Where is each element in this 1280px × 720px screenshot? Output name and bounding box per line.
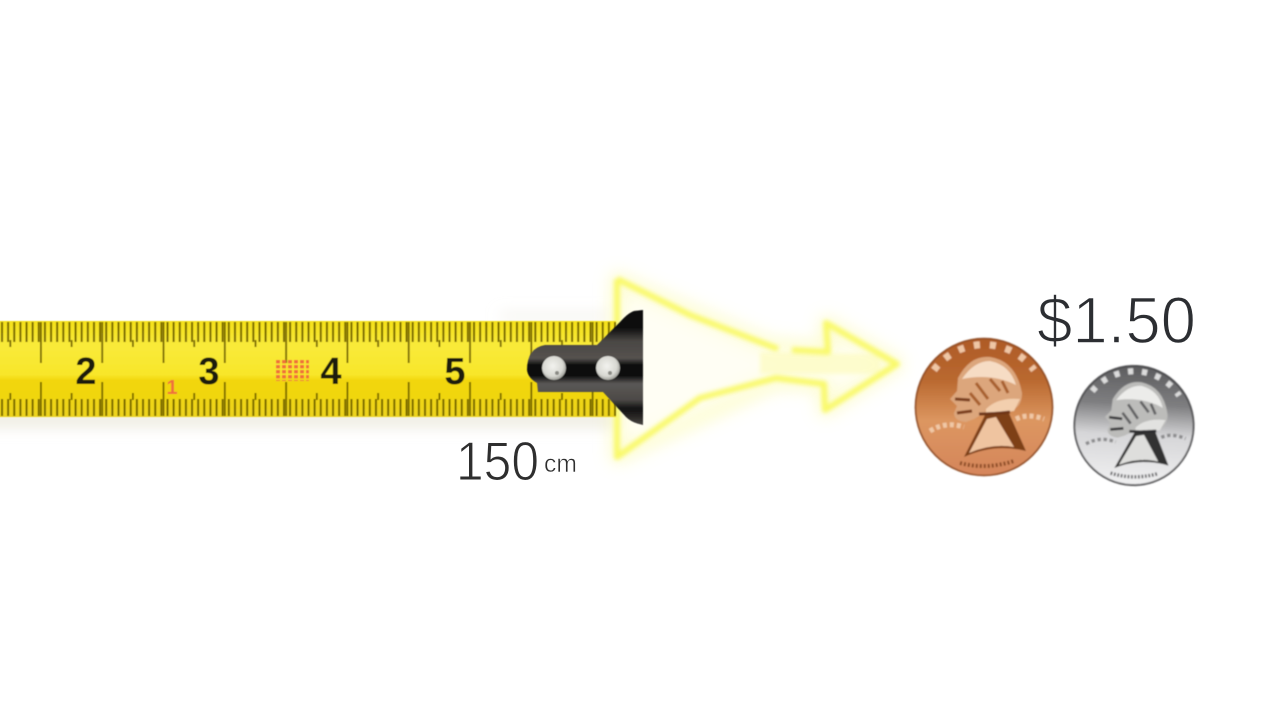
red tape marks: 1	[166, 377, 178, 399]
glowing yellow arrow	[617, 279, 897, 457]
rivets	[542, 356, 620, 380]
portrait	[1114, 428, 1170, 471]
copper quarter coin	[916, 338, 1052, 476]
coin inscription marks	[1092, 369, 1180, 396]
label: price $1.50: $1.50	[1037, 283, 1196, 357]
coin inscription marks	[934, 345, 1034, 370]
tape numbers: 3	[198, 351, 220, 393]
label: 150 cm: 150	[456, 430, 539, 492]
bottom scale ticks	[0, 399, 616, 416]
centimetre lines	[0, 322, 616, 416]
laurel branches	[1086, 431, 1186, 449]
tape numbers: 4	[320, 351, 342, 393]
red tape marks	[166, 360, 309, 399]
tape shadow	[0, 312, 620, 427]
silver quarter coin	[1071, 363, 1197, 488]
tape body	[0, 321, 616, 417]
tape numbers: 5	[444, 351, 466, 393]
tape numbers	[75, 351, 466, 393]
label: 150 cm: cm	[544, 450, 577, 478]
tape hook	[527, 310, 643, 425]
portrait	[964, 411, 1026, 457]
laurel branches	[930, 416, 1044, 431]
tape numbers: 2	[75, 351, 97, 393]
tape measure	[0, 321, 616, 417]
top scale ticks	[0, 322, 616, 342]
